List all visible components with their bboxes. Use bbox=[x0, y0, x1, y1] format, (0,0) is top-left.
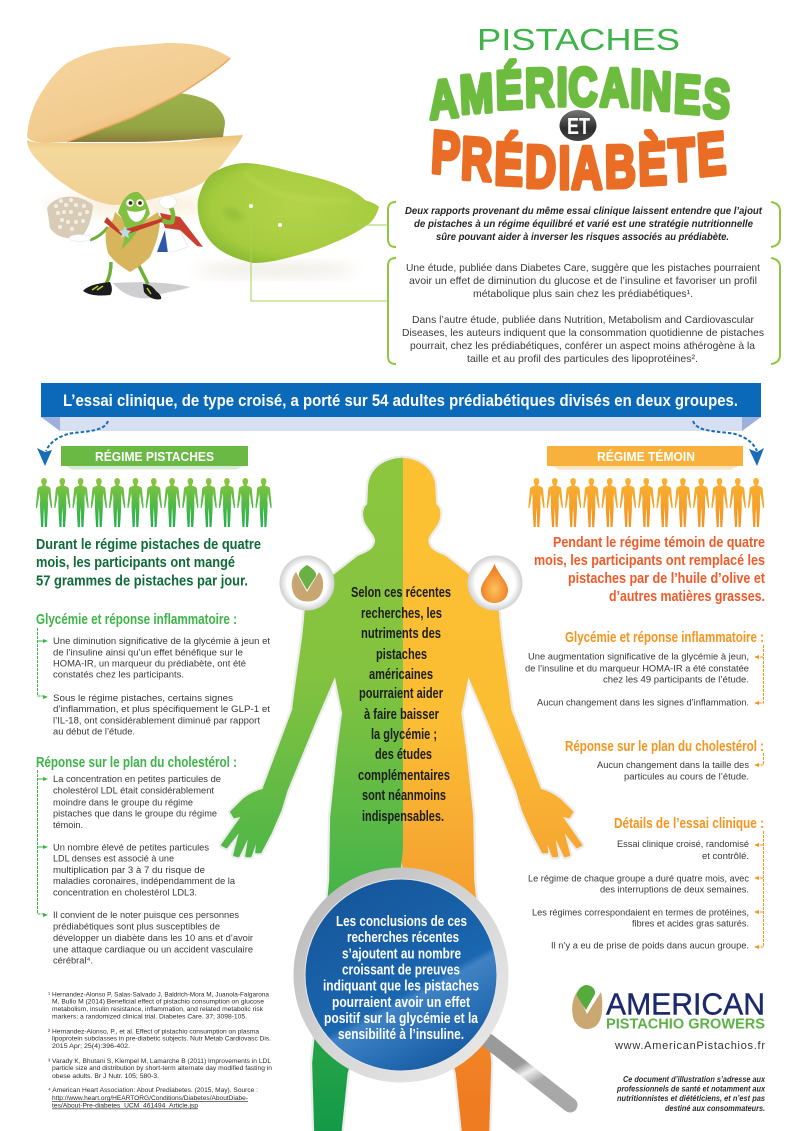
intro text: two studies bbox=[402, 263, 764, 365]
badge: ET bbox=[560, 110, 596, 141]
left arrows: glycémie bbox=[38, 628, 48, 699]
button: régime pistaches bbox=[61, 446, 248, 470]
footnotes: http://www.heart.org/HEARTORG/Conditions/Diabetes/AboutDiabe- bbox=[52, 1095, 248, 1102]
icon: pistachio bbox=[280, 556, 334, 610]
center text: complémentaires bbox=[358, 767, 450, 784]
magnifying glass callout: croissant de preuves bbox=[342, 962, 460, 978]
center text: pistaches bbox=[376, 646, 427, 663]
magnifying glass callout: sensibilité à l’insuline. bbox=[338, 1026, 464, 1043]
left text: cholestérol: LDL denses est associé à une bbox=[53, 854, 174, 865]
left text: glycémie: au début de l’étude. bbox=[53, 727, 135, 738]
footnotes: M, Bullo M (2014) Beneficial effect of pistachio consumption on glucose bbox=[52, 998, 264, 1006]
right heading: détails: Détails de l’essai clinique : bbox=[614, 815, 764, 832]
magnifying glass callout: indiquant que les pistaches bbox=[323, 978, 479, 994]
title: AMÉRICAINES: AMÉRICAINES bbox=[428, 58, 732, 131]
magnifying glass callout: recherches récentes bbox=[347, 929, 459, 946]
right text: détails: Essai clinique croisé, randomisé bbox=[617, 839, 749, 850]
right text: glycémie: de l’insuline et du marqueur HOMA-IR a été constatée bbox=[525, 663, 749, 674]
intro text: two studies: Dans l’autre étude, publiée dans Nutrition, Metabolism and Cardiovascular bbox=[412, 315, 755, 326]
right text: cholestérol: particules au cours de l’étude. bbox=[624, 772, 749, 783]
magnifying glass callout: positif sur la glycémie et la bbox=[324, 1010, 479, 1027]
center text: indispensables. bbox=[362, 808, 444, 825]
left text: glycémie: Une diminution significative de la glycémie à jeun et bbox=[53, 636, 270, 647]
left text: cholestérol: témoin. bbox=[53, 820, 83, 831]
intro text: two studies: Une étude, publiée dans Diabetes Care, suggère que les pistaches pourraient bbox=[406, 263, 760, 274]
right arrows: glycémie bbox=[754, 645, 764, 705]
disclaimer: nutritionnistes et diététiciens, et n’est pas bbox=[617, 1094, 766, 1103]
left text: glycémie: de l’insuline ainsi qu’un effet bénéfique sur le bbox=[53, 647, 243, 658]
logo: American Pistachio Growers bbox=[572, 985, 765, 1032]
right text: détails: Le régime de chaque groupe a duré quatre mois, avec bbox=[528, 873, 749, 884]
left text: cholestérol bbox=[53, 774, 254, 967]
right text: glycémie: chez les 49 participants de l’étude. bbox=[603, 675, 749, 686]
magnifying glass callout: s’ajoutent au nombre bbox=[342, 946, 461, 962]
left text: cholestérol: pistaches que dans le groupe du régime bbox=[53, 809, 217, 820]
left text: cholestérol: prédiabétiques sont plus susceptibles de bbox=[53, 921, 220, 932]
left text: cholestérol: Il convient de le noter puisque ces personnes bbox=[53, 910, 239, 921]
intro text: two studies: métabolique plus sain chez les prédiabétiques¹. bbox=[473, 289, 693, 300]
left text: glycémie: l’IL-18, ont considérablement diminué par rapport bbox=[53, 715, 260, 726]
footnotes: tes/About-Pre-diabetes_UCM_461494_Article.jsp bbox=[52, 1102, 198, 1110]
left lead text: Durant le régime pistaches de quatre bbox=[36, 536, 261, 553]
right text: détails: et contrôlé. bbox=[702, 851, 749, 862]
right text: détails: Il n’y a eu de prise de poids dans aucun groupe. bbox=[551, 941, 749, 952]
footnotes: markers: a randomized clinical trial. Diabetes Care. 37; 3098-105. bbox=[52, 1014, 247, 1020]
left text: cholestérol: maladies coronaires, indépendamment de la bbox=[53, 876, 236, 887]
disclaimer: destiné aux consommateurs. bbox=[665, 1104, 765, 1113]
footnotes: ² Hernandez-Alonso, P., et al. Effect of pistachio consumption on plasma bbox=[48, 1028, 259, 1036]
mascot: superhero pistachio bbox=[47, 192, 203, 299]
arrow: to control regimen bbox=[693, 421, 764, 466]
right lead text: Pendant le régime témoin de quatre bbox=[553, 534, 765, 551]
footnotes: ¹ Hernandez-Alonso P, Salas-Salvado J, Baldrich-Mora M, Juanola-Falgarona bbox=[48, 992, 269, 998]
intro text: two studies: pourrait, chez les prédiabétiques, conférer un aspect moins athérogène à la bbox=[410, 341, 755, 352]
magnifying glass callout: pourraient avoir un effet bbox=[332, 994, 470, 1011]
magnifying glass callout bbox=[294, 868, 570, 1105]
center text: la glycémie ; bbox=[371, 726, 437, 743]
intro text: italic summary: de pistaches à un régime équilibré et varié est une stratégie nutritionnelle bbox=[414, 219, 753, 230]
right text: glycémie bbox=[525, 652, 749, 708]
banner: clinical trial: L’essai clinique, de type croisé, a porté sur 54 adultes prédiabétiques divisés en deux groupes. bbox=[63, 392, 738, 410]
people row: green bbox=[36, 478, 272, 527]
right text: détails bbox=[528, 839, 749, 952]
disclaimer bbox=[616, 1075, 766, 1113]
footnotes: ⁴ American Heart Association: About Prediabetes. (2015, May). Source : bbox=[48, 1087, 258, 1094]
left text: glycémie: Sous le régime pistaches, certains signes bbox=[53, 693, 233, 704]
right lead text: d’autres matières grasses. bbox=[609, 588, 765, 605]
intro text: two studies: Diseases, les auteurs indiquent que la consommation quotidienne de pistaches bbox=[402, 328, 764, 339]
footnotes: metabolism, insulin resistance, inflammation, and related metabolic risk bbox=[52, 1006, 264, 1013]
left text: cholestérol: cholestérol LDL était considérablement bbox=[53, 786, 214, 797]
center text: nutriments des bbox=[361, 625, 441, 642]
right lead text: pistaches par de l’huile d’olive et bbox=[568, 570, 765, 587]
left heading: glycémie: Glycémie et réponse inflammatoire : bbox=[36, 611, 237, 628]
right text: détails: Les régimes correspondaient en termes de protéines, bbox=[532, 907, 749, 918]
center text: Selon ces récentes bbox=[351, 584, 451, 601]
left text: glycémie: d’inflammation, et plus spécifiquement le GLP-1 et bbox=[53, 704, 270, 715]
center text: des études bbox=[375, 746, 432, 763]
disclaimer: professionnels de santé et notamment aux bbox=[616, 1084, 765, 1094]
intro text: italic summary bbox=[405, 206, 763, 243]
intro text: two studies: avoir un effet de diminution du glucose et de l’insuline et favoriser un profil bbox=[409, 276, 757, 287]
arrow: to pistachio regimen bbox=[37, 421, 108, 466]
connector lines from kernel to brackets bbox=[249, 204, 388, 301]
footnotes: lipoprotein subclasses in pre-diabetic subjects. Nutr Metab Cardiovasc Dis. bbox=[52, 1036, 271, 1042]
badge: ET: ET bbox=[567, 113, 590, 139]
icon: oil drop bbox=[468, 556, 522, 610]
left text: cholestérol: multiplication par 3 à 7 du risque de bbox=[53, 865, 205, 876]
right text: cholestérol: Aucun changement dans la taille des bbox=[597, 760, 749, 771]
left text: glycémie: HOMA-IR, un marqueur du prédiabète, ont été bbox=[53, 658, 246, 670]
right lead text bbox=[534, 534, 765, 605]
central body figure bbox=[222, 459, 581, 1131]
disclaimer: Ce document d’illustration s’adresse aux bbox=[623, 1075, 765, 1084]
footnotes: particle size and distribution by short-term alternate day modified fasting in bbox=[52, 1065, 272, 1072]
right text: cholestérol bbox=[597, 760, 749, 783]
right text: glycémie: Aucun changement dans les signes d’inflammation. bbox=[537, 697, 749, 708]
left text: cholestérol: concentration en cholestérol LDL3. bbox=[53, 887, 197, 898]
brackets around intro text bbox=[388, 202, 780, 364]
footnotes: 2015 Apr; 25(4):396-402. bbox=[52, 1043, 130, 1050]
left lead text: 57 grammes de pistaches par jour. bbox=[36, 572, 248, 590]
intro text: two studies: taille et au profil des particules des lipoprotéines². bbox=[467, 354, 698, 365]
left text: glycémie bbox=[53, 636, 270, 738]
logo: American Pistachio Growers: AMERICAN bbox=[606, 988, 765, 1022]
website: www.AmericanPistachios.fr bbox=[614, 1040, 765, 1052]
footnotes: obese adults. Br J Nutr. 105; 580-3. bbox=[52, 1073, 159, 1080]
intro text: italic summary: sûre pouvant aider à inverser les risques associés au prédiabète. bbox=[436, 232, 729, 243]
left lead text: mois, les participants ont mangé bbox=[36, 554, 235, 571]
logo: American Pistachio Growers: PISTACHIO GROWERS bbox=[606, 1016, 765, 1032]
people row: orange bbox=[528, 478, 764, 527]
left text: glycémie: constatés chez les participants. bbox=[53, 670, 184, 680]
center text: à faire baisser bbox=[364, 706, 439, 723]
center text: recherches, les bbox=[361, 605, 442, 622]
center text: sont néanmoins bbox=[362, 787, 446, 804]
button: régime témoin: RÉGIME TÉMOIN bbox=[597, 449, 695, 464]
right arrows: cholestérol bbox=[754, 753, 764, 767]
center text: pourraient aider bbox=[359, 685, 443, 702]
left heading: cholestérol: Réponse sur le plan du cholestérol : bbox=[36, 754, 237, 771]
left text: cholestérol: La concentration en petites particules de bbox=[53, 774, 221, 785]
title: PISTACHES: PISTACHES bbox=[477, 22, 680, 57]
left arrows: cholestérol bbox=[38, 770, 48, 917]
left text: cholestérol: moindre dans le groupe du régime bbox=[53, 797, 193, 808]
left text: cholestérol: développer un diabète dans les 10 ans et d’avoir bbox=[53, 933, 254, 944]
footnotes bbox=[48, 992, 272, 1110]
right text: glycémie: Une augmentation significative de la glycémie à jeun, bbox=[528, 652, 749, 663]
footnotes: ³ Varady K, Bhutani S, Klempel M, Lamarche B (2011) Improvements in LDL bbox=[48, 1058, 271, 1065]
right arrows: détails bbox=[754, 831, 764, 949]
left text: cholestérol: cérébral⁴. bbox=[53, 956, 93, 967]
title: PRÉDIABÈTE: PRÉDIABÈTE bbox=[430, 119, 727, 202]
left text: cholestérol: une attaque cardiaque ou un accident vasculaire bbox=[53, 944, 253, 955]
banner: clinical trial bbox=[41, 383, 761, 431]
illustration: pistachio in shell and kernel bbox=[27, 43, 379, 277]
button: régime pistaches: RÉGIME PISTACHES bbox=[95, 449, 214, 464]
left text: cholestérol: Un nombre élevé de petites particules bbox=[53, 843, 209, 854]
intro text: italic summary: Deux rapports provenant du même essai clinique laissent entendre que l’ajout bbox=[405, 206, 763, 217]
button: régime témoin bbox=[547, 446, 743, 470]
left lead text bbox=[36, 536, 261, 590]
right text: détails: des interruptions de deux semaines. bbox=[600, 885, 749, 896]
right text: détails: fibres et acides gras saturés. bbox=[632, 918, 749, 929]
center text: américaines bbox=[369, 666, 433, 683]
center text bbox=[351, 584, 451, 825]
magnifying glass callout: Les conclusions de ces bbox=[336, 913, 467, 930]
